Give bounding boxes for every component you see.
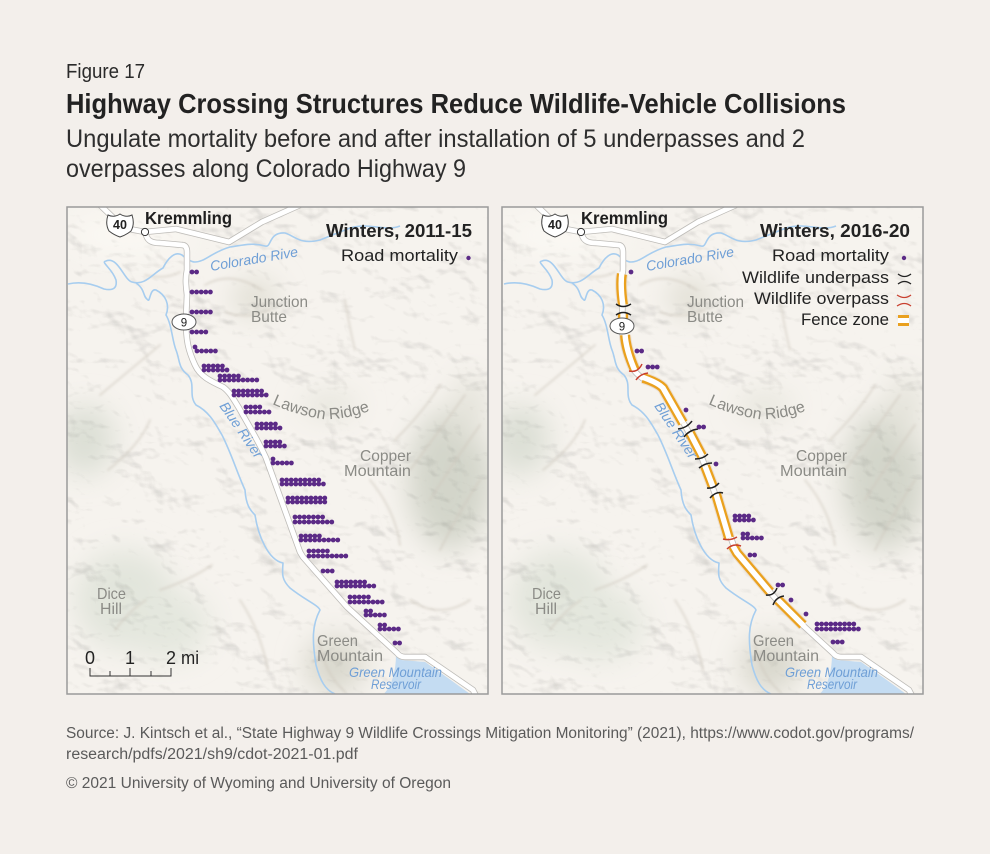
- subtitle: Ungulate mortality before and after installation of 5 underpasses and 2: [66, 125, 805, 153]
- place labels: Mountain: [344, 463, 411, 480]
- figure label: Figure 17: [66, 61, 145, 83]
- shield: US 40: 40: [548, 218, 562, 232]
- place labels: Mountain: [753, 648, 819, 665]
- legend: Road mortality: [772, 246, 890, 265]
- source note: Source: J. Kintsch et al., “State Highway 9 Wildlife Crossings Mitigation Monitoring” (2021), https://www.codot.gov/programs/: [66, 725, 915, 742]
- place labels: Green: [753, 633, 794, 650]
- water labels: Reservoir: [371, 676, 422, 692]
- highways: [536, 205, 912, 696]
- legend: [742, 246, 911, 329]
- panel: map winters 2016-20: [501, 206, 924, 695]
- place labels: Dice: [532, 586, 561, 603]
- place labels: Dice: [97, 586, 126, 603]
- Kremmling town marker: [141, 228, 149, 236]
- scale bar: [85, 648, 199, 676]
- map frame: [67, 207, 488, 694]
- scale bar: 1: [125, 648, 135, 668]
- water labels: [647, 248, 878, 692]
- place labels: Junction: [251, 294, 308, 311]
- Kremmling label: Kremmling: [145, 208, 232, 228]
- place labels: Butte: [687, 309, 723, 326]
- Kremmling label: Kremmling: [581, 208, 668, 228]
- water labels: [211, 248, 442, 692]
- place labels: Junction: [687, 294, 744, 311]
- water labels: Green Mountain: [785, 664, 878, 680]
- source note: research/pdfs/2021/sh9/cdot-2021-01.pdf: [66, 746, 359, 763]
- legend: Road mortality: [341, 246, 459, 265]
- place labels: [97, 294, 412, 665]
- fence zones: [621, 272, 804, 626]
- shield: route 9: 9: [181, 318, 187, 330]
- shield: route 9: 9: [619, 322, 625, 334]
- Kremmling town marker: [577, 228, 585, 236]
- shield: US 40: 40: [113, 218, 127, 232]
- legend: Fence zone: [801, 310, 889, 329]
- panel heading: Winters, 2016-20: [760, 220, 910, 241]
- place labels: Lawson Ridge: [709, 394, 804, 420]
- reservoir: [820, 654, 906, 694]
- place labels: Mountain: [317, 648, 383, 665]
- legend: Wildlife underpass: [742, 268, 889, 287]
- place labels: Butte: [251, 309, 287, 326]
- source note: [66, 725, 915, 763]
- place labels: Hill: [535, 601, 557, 618]
- subtitle: [66, 125, 805, 183]
- wildlife underpass markers: [616, 304, 784, 605]
- place labels: Mountain: [780, 463, 847, 480]
- shield: US 40: [107, 214, 133, 237]
- rivers: [68, 226, 400, 694]
- map frame: [502, 207, 923, 694]
- road mortality dots: [192, 272, 400, 643]
- place labels: [532, 294, 848, 665]
- wildlife overpass markers: [629, 364, 741, 549]
- copyright: © 2021 University of Wyoming and University of Oregon: [66, 775, 451, 792]
- water labels: Reservoir: [807, 676, 858, 692]
- terrain basemap: [490, 207, 927, 694]
- place labels: Copper: [796, 448, 848, 465]
- place labels: Lawson Ridge: [273, 394, 368, 420]
- title: Highway Crossing Structures Reduce Wildlife-Vehicle Collisions: [66, 88, 846, 119]
- shield: route 9: [610, 318, 634, 334]
- water labels: Green Mountain: [349, 664, 442, 680]
- terrain basemap: [55, 207, 492, 694]
- place labels: Copper: [360, 448, 412, 465]
- shield: route 9: [172, 314, 196, 330]
- road mortality dots: [631, 272, 861, 642]
- place labels: Green: [317, 633, 358, 650]
- water labels: Blue River: [219, 402, 262, 457]
- rivers: [504, 226, 836, 694]
- panel: map winters 2011-15: [66, 206, 489, 695]
- water labels: Blue River: [654, 402, 696, 458]
- place labels: Hill: [100, 601, 122, 618]
- panel heading: Winters, 2011-15: [326, 220, 472, 241]
- scale bar: 2: [166, 648, 176, 668]
- scale bar: mi: [181, 648, 199, 668]
- reservoir: [384, 654, 470, 694]
- shield: US 40: [542, 214, 568, 237]
- highways: [100, 205, 476, 696]
- legend: Wildlife overpass: [754, 289, 889, 308]
- scale bar: 0: [85, 648, 95, 668]
- subtitle: overpasses along Colorado Highway 9: [66, 155, 466, 183]
